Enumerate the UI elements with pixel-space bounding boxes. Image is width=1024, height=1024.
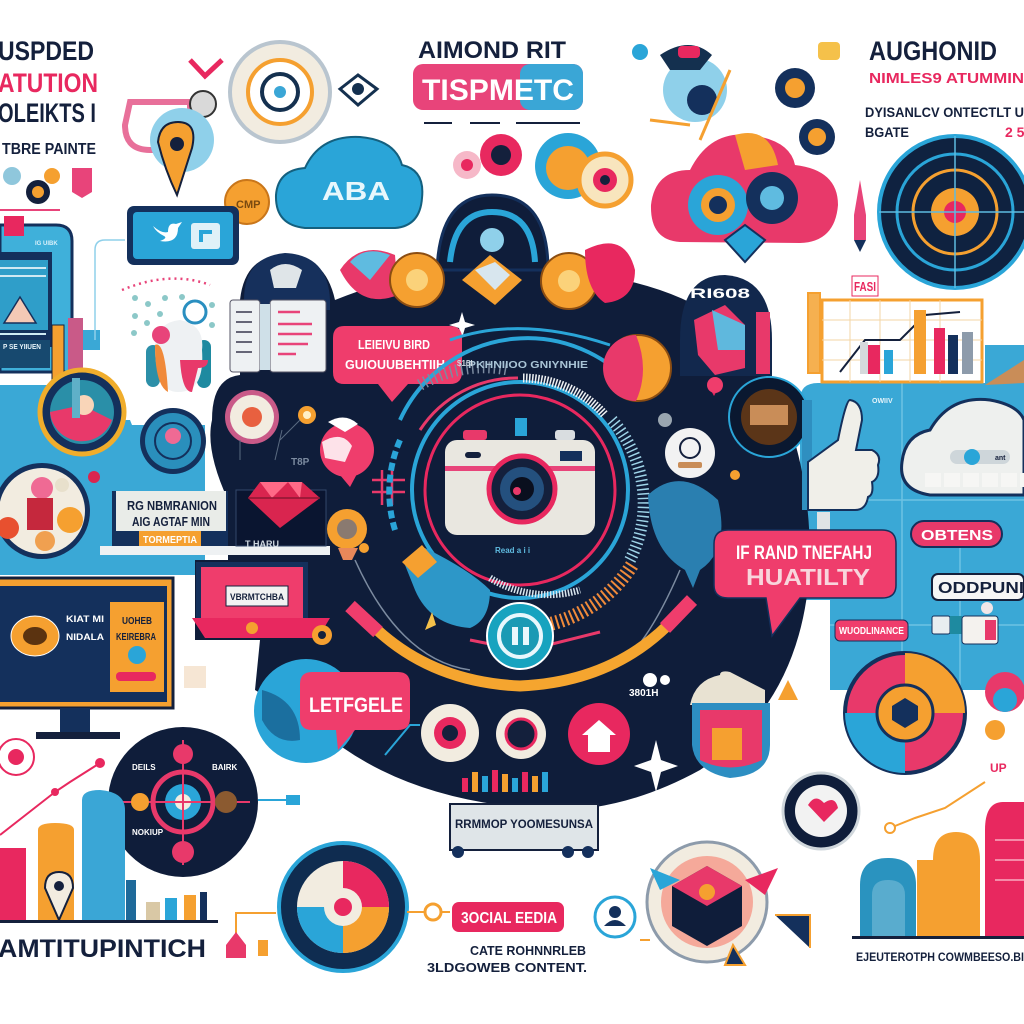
chart: right line — [885, 761, 1007, 833]
heading: top right: NIMLES9 ATUMMIN — [869, 70, 1024, 87]
icon: medallions beside hub — [88, 390, 316, 483]
panel: left monitor: KEIREBRA — [116, 632, 156, 643]
panel: label plate: RRMMOP YOOMESUNSA — [455, 817, 593, 831]
icon: small left nodes — [0, 167, 92, 236]
icon: thumbs up — [802, 400, 879, 530]
text: bottom centre caption: CATE ROHNNRLEB — [470, 943, 586, 958]
icon: right hub items — [603, 275, 809, 588]
text: bottom centre caption: 3LDGOWEB CONTENT. — [427, 960, 587, 975]
heading: top centre — [413, 37, 583, 123]
callout: pink left speech bubble: LEIEIVU BIRD — [358, 337, 430, 352]
icon: pink cloud — [651, 133, 838, 262]
text: curved hub labels — [457, 359, 588, 555]
callout: social media label — [407, 897, 635, 937]
callout: OBTENS button: OBTENS — [921, 527, 993, 544]
chart: bottom left bars — [0, 790, 218, 923]
icon: red gem: T HARU — [245, 539, 279, 549]
icon: top left target with pin — [125, 42, 377, 224]
heading: top left: TBRE PAINTE — [2, 141, 96, 158]
icon: hub lower buttons — [385, 703, 630, 765]
chart: hub yellow arc with button — [350, 600, 692, 686]
callout: pink left speech bubble — [333, 326, 462, 402]
callout: OBTENS button — [911, 521, 1002, 547]
text: curved hub labels: PKHNIIOO GNIYNHIE — [468, 360, 588, 371]
icon: left line chart — [0, 739, 105, 835]
icon: cloud with server — [902, 399, 1024, 495]
icon: hex medallion — [845, 653, 1024, 773]
text: curved hub labels: $15I — [457, 359, 473, 368]
icon: radar target — [879, 136, 1024, 288]
icon: medallions beside hub: T8P — [291, 457, 310, 468]
icon: heart bubble — [320, 417, 374, 487]
heading: top right — [865, 36, 1024, 140]
heading: top left — [0, 36, 98, 158]
heading: top centre: AIMOND RIT — [418, 37, 566, 64]
heading: top right: 2 5 — [1005, 124, 1024, 140]
callout: small tag: WUODLINANCE — [839, 626, 904, 637]
panel: right blue background — [800, 345, 1024, 700]
icon: bottom cube medallion — [640, 842, 810, 965]
heading: top right: AUGHONID — [869, 36, 997, 66]
icon: red gem — [236, 482, 326, 549]
panel: notice board — [100, 491, 330, 555]
heading: bottom left: AMTITUPINTICH — [0, 935, 206, 963]
callout: pink right speech bubble — [714, 530, 896, 636]
icon: star and small figures: 3801H — [629, 688, 658, 699]
panel: central dark circle — [195, 255, 810, 810]
icon: network medallion — [108, 727, 300, 877]
callout: pink right speech bubble: HUATILTY — [746, 564, 870, 590]
chart: hub equalizer — [462, 770, 548, 792]
panel: pink printer: VBRMTCHBA — [230, 592, 284, 602]
icon: globe with bubble — [254, 659, 410, 763]
icon: left clock medallion — [40, 318, 124, 454]
callout: pink right speech bubble: IF RAND TNEFAHJ — [736, 543, 872, 564]
panel: notice board: AIG AGTAF MIN — [132, 514, 210, 529]
panel: notice board: TORMEPTIA — [143, 535, 197, 546]
heading: top left: USPDED — [0, 36, 94, 66]
icon: cloud with server: ant — [995, 455, 1006, 462]
icon: ABA cloud: ABA — [322, 176, 390, 206]
panel: left monitor: NIDALA — [66, 632, 105, 642]
icon: network medallion: DEILS — [132, 763, 156, 772]
text: bottom centre caption — [427, 943, 587, 975]
icon: heart medallion — [783, 773, 859, 849]
callout: pink left speech bubble: GUIOUUBEHTIIH — [345, 357, 445, 372]
icon: network medallion: NOKIUP — [132, 828, 164, 837]
chart: right line: UP — [990, 761, 1007, 775]
icon: top left target with pin: CMP — [236, 199, 260, 211]
icon: hub gold head — [327, 470, 405, 560]
icon: people collage circle — [0, 463, 90, 559]
panel: left blue background: P SE YIIUEN — [3, 344, 41, 351]
icon: top centre rings — [453, 133, 631, 206]
icon: globe with bubble: LETFGELE — [309, 694, 403, 717]
panel: left monitor: KIAT MI — [66, 614, 104, 624]
panel: notice board: RG NBMRANION — [127, 498, 217, 513]
icon: blue cat figure — [402, 545, 490, 630]
panel: left blue background: IG UIBK — [35, 241, 58, 247]
icon: hub top coins — [340, 243, 635, 338]
icon: document book — [230, 253, 330, 372]
panel: left monitor — [0, 578, 173, 739]
chart: hub gauge rings — [355, 329, 680, 670]
panel: right blue background: OWIIV — [872, 398, 893, 405]
heading: top left: ATUTION — [0, 68, 98, 98]
icon: rocket line — [854, 180, 866, 252]
icon: central camera — [445, 418, 595, 535]
text: curved hub labels: Read a i i — [495, 546, 530, 555]
callout: small tag — [835, 620, 908, 641]
heading: top centre: TISPMETC — [422, 74, 574, 107]
heading: top right: BGATE — [865, 124, 909, 140]
icon: ODPUNI label and blocks: ODDPUNI — [938, 580, 1024, 597]
icon: people group — [122, 279, 215, 392]
icon: ABA cloud — [276, 137, 422, 228]
panel: pink printer — [184, 562, 332, 688]
panel: label plate — [450, 804, 598, 858]
panel: left blue background — [0, 225, 205, 575]
icon: bottom target — [226, 843, 407, 971]
icon: top right gadgets — [632, 42, 840, 155]
icon: top of hub dome — [437, 195, 548, 305]
icon: network medallion: BAIRK — [212, 763, 238, 772]
icon: ODPUNI label and blocks — [932, 574, 1024, 644]
chart: top right bar chart — [808, 276, 982, 382]
heading: top left: OLEIKTS I — [0, 98, 96, 128]
panel: left monitor: UOHEB — [122, 616, 152, 627]
icon: twitter card — [127, 206, 239, 265]
callout: social media label: 3OCIAL EEDIA — [461, 910, 557, 927]
icon: star and small figures — [629, 671, 798, 792]
chart: bottom right bars — [852, 802, 1024, 939]
icon: right hub items: RI608 — [690, 285, 750, 301]
chart: top right bar chart: FASI — [854, 279, 876, 294]
